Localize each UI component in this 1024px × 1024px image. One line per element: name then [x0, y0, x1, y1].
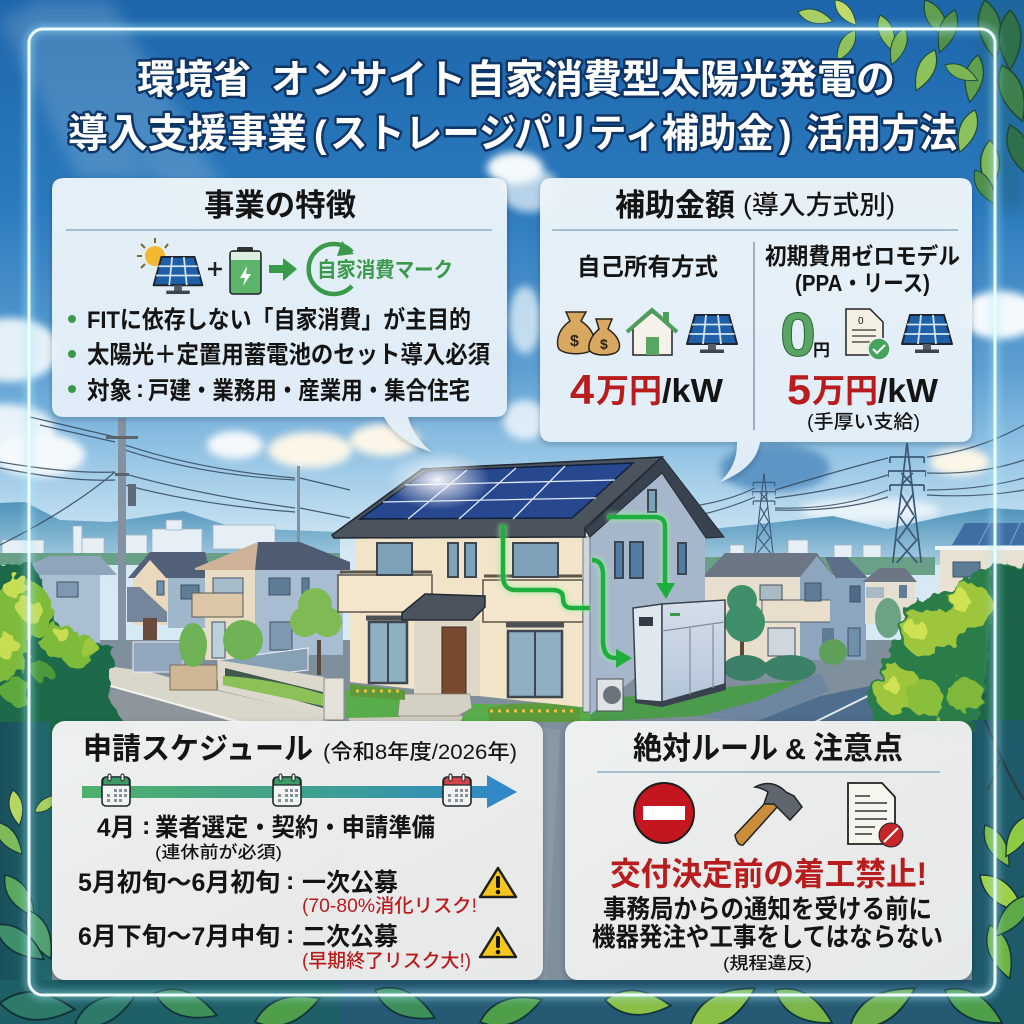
flower beds	[350, 684, 580, 722]
city skyline	[2, 520, 881, 559]
solar array	[360, 463, 633, 519]
upper windows	[377, 490, 686, 578]
entrance	[414, 620, 480, 696]
amount: /kW	[662, 372, 724, 409]
icon: hammer	[735, 783, 802, 845]
icon: money bags	[558, 312, 620, 355]
schedule: first round: 5月初旬～6月初旬	[78, 869, 280, 897]
outdoor unit	[597, 679, 623, 711]
heading: 事業の特徴	[204, 188, 356, 223]
column: 自己所有方式	[558, 254, 737, 413]
heading	[83, 733, 517, 766]
heading: 絶対ルール	[633, 731, 778, 766]
schedule: second round	[78, 921, 471, 972]
schedule: April: 業者選定・契約・申請準備	[155, 814, 435, 842]
schedule: second round: (早期終了リスク大!)	[302, 950, 471, 972]
schedule: second round: :	[286, 921, 294, 949]
schedule: first round	[78, 867, 477, 917]
icon: contract document: 0	[858, 316, 864, 327]
house with solar roof and battery	[332, 450, 726, 722]
icon: arrow	[269, 258, 297, 281]
heading: &	[785, 734, 806, 766]
heading: (令和8年度/2026年)	[323, 741, 517, 764]
amount: 万円	[596, 372, 662, 409]
column: 初期費用ゼロモデル	[765, 243, 960, 433]
schedule: first round: 一次公募	[302, 869, 398, 897]
garden trees	[179, 585, 901, 681]
foliage bottom edges	[0, 720, 1024, 1024]
heading: 申請スケジュール	[83, 733, 313, 766]
warning text: 交付決定前の着工禁止!	[610, 856, 927, 892]
amount: 5	[787, 366, 811, 413]
green horizon band	[0, 553, 935, 575]
explanation: 機器発注や工事をしてはならない	[592, 922, 943, 952]
icon: zero yen: 円	[813, 341, 830, 360]
explanation	[592, 894, 943, 973]
icon: warning	[480, 868, 516, 897]
panel: 絶対ルール＆注意点	[565, 721, 972, 980]
explanation: 事務局からの通知を受ける前に	[603, 894, 932, 924]
amount: 万円	[812, 372, 878, 409]
schedule: April: 4月	[97, 814, 135, 842]
icon: battery	[230, 247, 261, 294]
icon: money bags: $	[600, 336, 608, 352]
power lines	[0, 417, 1024, 545]
panel: 申請スケジュール	[52, 721, 543, 980]
schedule: April: :	[142, 812, 150, 840]
icon: no entry	[634, 783, 694, 843]
column: 自己所有方式: 自己所有方式	[577, 254, 718, 281]
transmission towers	[752, 443, 926, 563]
bullet list: 戸建・業務用・産業用・集合住宅	[148, 377, 470, 405]
column: 初期費用ゼロモデル: (手厚い支給)	[807, 411, 920, 433]
dark blue cloud right	[720, 444, 830, 492]
bullet list	[68, 305, 490, 405]
sun glare	[386, 450, 490, 510]
battery unit	[633, 600, 726, 707]
schedule: April: (連休前が必須)	[155, 842, 282, 862]
title: 導入支援事業	[68, 112, 307, 156]
schedule: second round: 6月下旬～7月中旬	[78, 923, 280, 951]
heading: (導入方式別)	[743, 190, 895, 220]
column: 初期費用ゼロモデル: (PPA・リース)	[795, 270, 930, 296]
heading	[633, 731, 903, 766]
icon: plus	[208, 262, 222, 276]
heading: 補助金額	[615, 188, 735, 223]
bullet list: FITに依存しない「自家消費」が主目的	[87, 305, 471, 334]
schedule: April	[97, 812, 435, 862]
schedule: first round: :	[286, 867, 294, 895]
title: 活用方法	[806, 112, 957, 156]
self-consumption mark: 自家消費マーク	[317, 259, 453, 282]
panel: 補助金額	[540, 178, 972, 482]
bullet list: 対象	[87, 377, 132, 405]
amount	[570, 366, 724, 413]
title: オンサイト自家消費型太陽光発電の	[271, 58, 895, 102]
icon: money bags: $	[570, 333, 579, 350]
heading	[615, 188, 895, 223]
bullet list: :	[136, 376, 144, 403]
title: )	[779, 114, 792, 156]
cream front wall	[350, 535, 590, 708]
schedule: second round: 二次公募	[302, 923, 398, 951]
icon: solar panel	[687, 315, 737, 353]
neighbouring houses right	[705, 523, 1024, 662]
lower windows	[369, 622, 562, 697]
tree leaves top right	[796, 0, 1024, 210]
icon: solar panel	[902, 315, 952, 353]
utility pole	[106, 418, 300, 683]
title: ストレージパリティ補助金	[330, 112, 774, 156]
gable wall	[588, 470, 705, 715]
icon: warning	[480, 928, 516, 957]
icon: document prohibited	[848, 783, 903, 847]
explanation: (規程違反)	[723, 954, 812, 973]
self-consumption mark	[309, 241, 453, 294]
bullet list: 太陽光＋定置用蓄電池のセット導入必須	[87, 341, 490, 369]
icon: house	[627, 310, 677, 355]
icon: contract document	[846, 309, 890, 360]
amount: /kW	[878, 372, 939, 409]
timeline arrow	[82, 774, 517, 808]
distant mountains	[0, 502, 340, 565]
foreground foliage right	[865, 560, 1024, 735]
title: (	[314, 114, 327, 156]
column: 初期費用ゼロモデル: 初期費用ゼロモデル	[765, 243, 960, 269]
amount	[787, 366, 939, 413]
icon: zero yen	[780, 301, 830, 370]
neighbouring houses left	[7, 542, 350, 660]
heading: 注意点	[813, 731, 903, 766]
title: 環境省	[137, 58, 251, 102]
icon: sun and solar panel	[137, 238, 202, 294]
sun rays	[0, 0, 250, 230]
foreground foliage left	[0, 565, 135, 735]
clouds	[0, 152, 1024, 522]
garden walls and hedge	[133, 642, 344, 720]
panel: 事業の特徴	[52, 178, 507, 452]
title	[68, 58, 957, 156]
roof	[332, 457, 662, 538]
schedule: first round: (70-80%消化リスク!	[302, 895, 477, 917]
green power flow arrows	[503, 517, 675, 668]
icon: zero yen: 0	[780, 301, 816, 370]
ground and road	[0, 640, 1024, 1024]
amount: 4	[570, 366, 595, 413]
